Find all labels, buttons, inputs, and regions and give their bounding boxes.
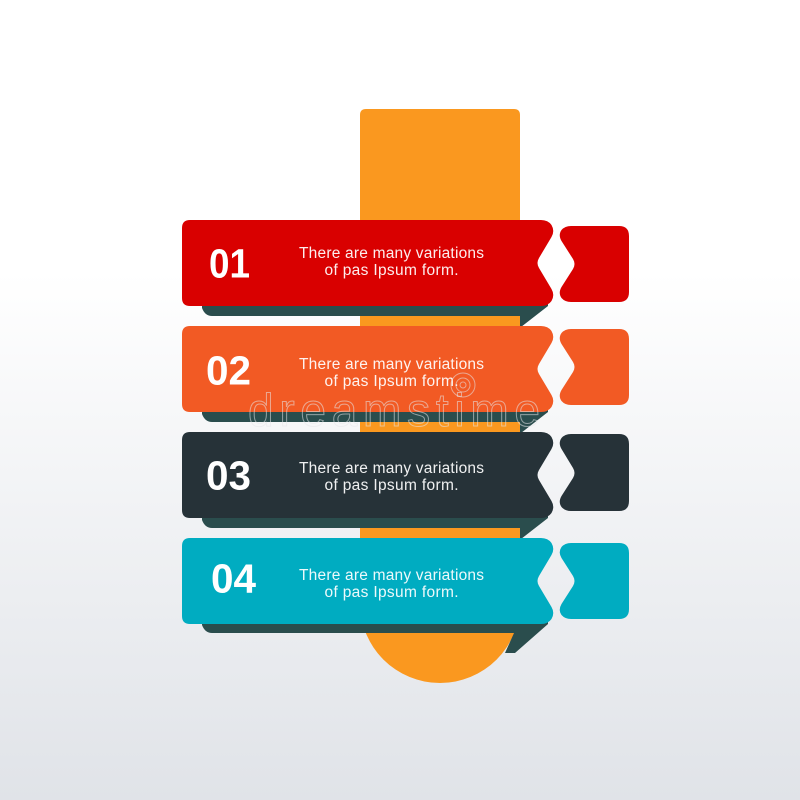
text: row 3: There are many variations xyxy=(299,460,484,477)
row 4: teal xyxy=(182,538,629,653)
number: 03: 03 xyxy=(206,452,251,498)
number: 04: 04 xyxy=(211,556,256,602)
text: row 2: There are many variations xyxy=(299,356,484,373)
row 1: red xyxy=(182,220,629,327)
ribbon: row 2 xyxy=(182,326,553,412)
shadow: row 2 xyxy=(202,406,548,433)
row 2: orange xyxy=(182,326,629,433)
number: 02: 02 xyxy=(206,348,251,394)
tab: row 1 xyxy=(560,226,629,302)
number: 01: 01 xyxy=(209,240,250,286)
central orange capsule xyxy=(360,109,520,683)
text: row 1: of pas Ipsum form. xyxy=(324,262,458,279)
text: row 4: There are many variations xyxy=(299,567,484,584)
watermark: dreamstime xyxy=(248,384,540,436)
row 3: dark xyxy=(182,432,629,539)
text: row 2: of pas Ipsum form. xyxy=(324,373,458,390)
ribbon: row 1 xyxy=(182,220,553,306)
text: row 1: There are many variations xyxy=(299,245,484,262)
ribbon: row 4 xyxy=(182,538,553,624)
text: row 4: of pas Ipsum form. xyxy=(324,584,458,601)
shadow: row 3 xyxy=(202,512,548,539)
tab: row 4 xyxy=(560,543,629,619)
ribbon: row 3 xyxy=(182,432,553,518)
shadow: row 4 xyxy=(202,618,548,653)
tab: row 2 xyxy=(560,329,629,405)
shadow: row 1 xyxy=(202,300,548,327)
tab: row 3 xyxy=(560,434,629,511)
text: row 3: of pas Ipsum form. xyxy=(324,477,458,494)
